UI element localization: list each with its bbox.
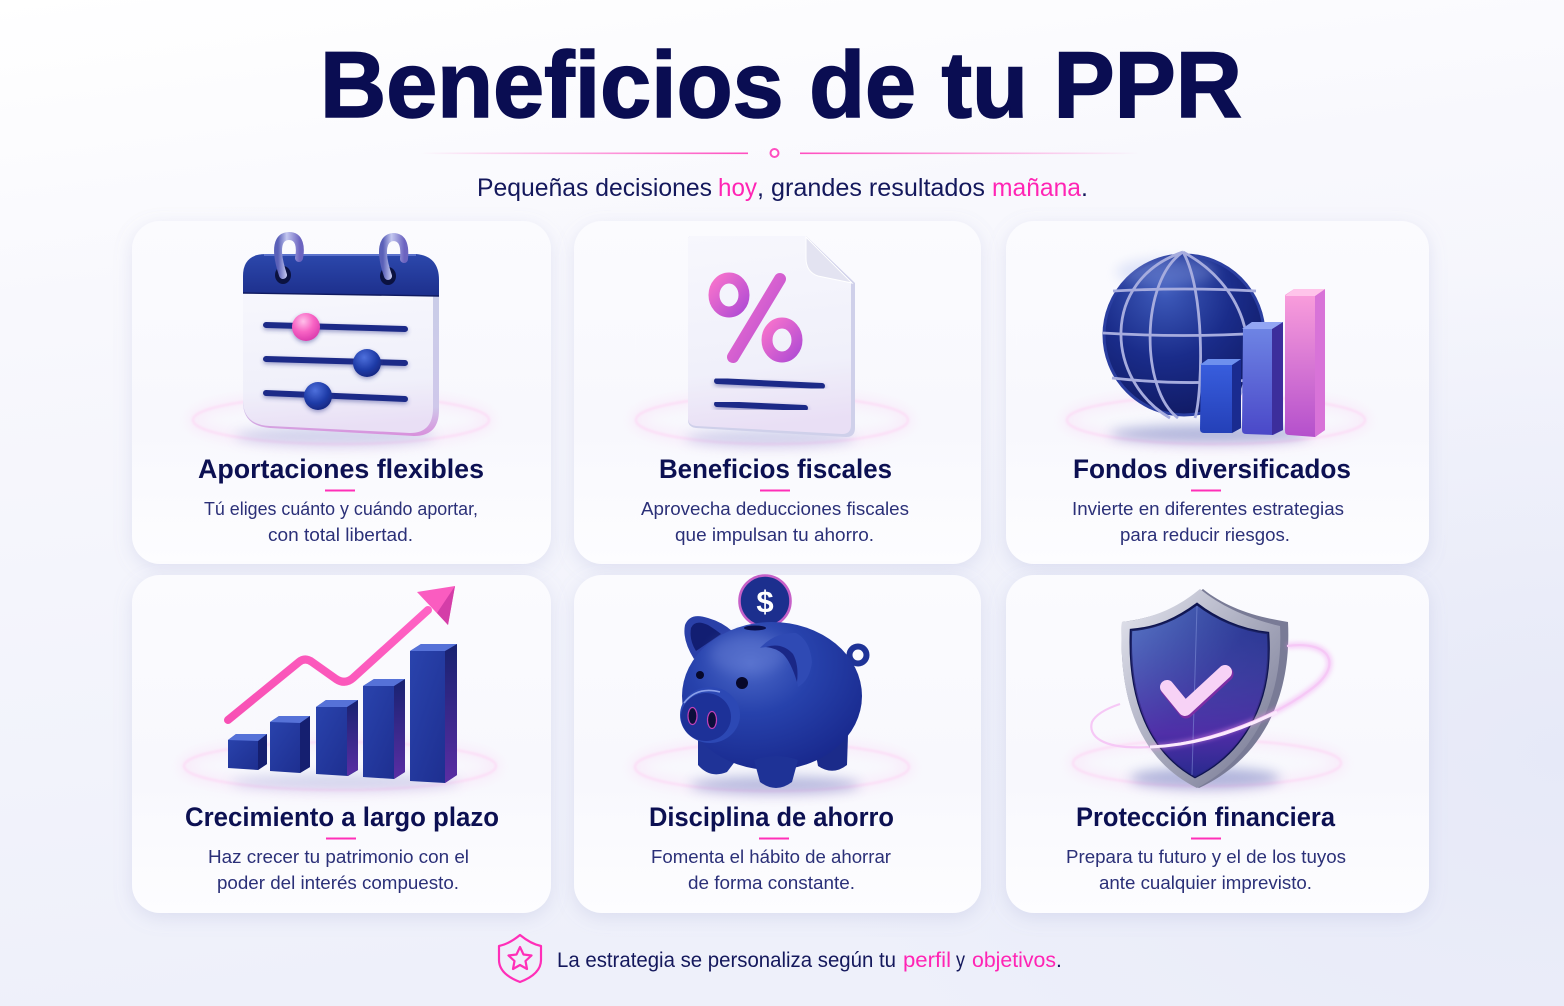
footer note: y <box>956 949 965 972</box>
panel: aportaciones flexibles <box>132 221 551 564</box>
footer note: La estrategia se personaliza según tu <box>557 949 896 972</box>
description: Haz crecer tu patrimonio con el <box>208 846 469 867</box>
description: poder del interés compuesto. <box>217 872 459 893</box>
description <box>208 846 469 893</box>
subtitle <box>477 174 1088 202</box>
coin: $ <box>756 584 774 619</box>
description: para reducir riesgos. <box>1120 524 1290 545</box>
footer note <box>557 949 1062 972</box>
icon: growth bars and arrow <box>184 586 496 790</box>
panel: beneficios fiscales <box>574 221 981 564</box>
description <box>651 846 891 893</box>
icon: shield with check <box>1073 589 1341 789</box>
description: Fomenta el hábito de ahorrar <box>651 846 891 867</box>
icon: piggy bank with coin <box>635 576 909 794</box>
panel: fondos diversificados <box>1006 221 1429 564</box>
heading: Disciplina de ahorro <box>649 802 894 832</box>
description <box>1066 846 1346 893</box>
footer note: objetivos <box>972 949 1056 972</box>
description: ante cualquier imprevisto. <box>1099 872 1312 893</box>
heading: Aportaciones flexibles <box>198 454 484 484</box>
icon: shield with star <box>499 935 541 982</box>
description: de forma constante. <box>688 872 855 893</box>
description: Tú eliges cuánto y cuándo aportar, <box>204 498 478 519</box>
footer note: perfil <box>903 949 951 972</box>
subtitle: Pequeñas decisiones <box>477 174 712 202</box>
description <box>641 498 909 545</box>
panel: protección financiera <box>1006 575 1429 913</box>
description: Aprovecha deducciones fiscales <box>641 498 909 519</box>
orbit ring <box>1150 645 1329 747</box>
subtitle: hoy <box>718 174 757 202</box>
panel: disciplina de ahorro <box>574 575 981 913</box>
description: que impulsan tu ahorro. <box>675 524 874 545</box>
heading: Crecimiento a largo plazo <box>185 802 499 832</box>
icon: calendar with sliders <box>193 236 489 446</box>
heading: Protección financiera <box>1076 802 1336 832</box>
description: Prepara tu futuro y el de los tuyos <box>1066 846 1346 867</box>
description: Invierte en diferentes estrategias <box>1072 498 1344 519</box>
panel: crecimiento a largo plazo <box>132 575 551 913</box>
subtitle: mañana <box>992 174 1081 202</box>
description <box>1072 498 1344 545</box>
description: con total libertad. <box>268 524 413 545</box>
subtitle: , grandes resultados <box>757 174 985 202</box>
subtitle: . <box>1081 174 1088 202</box>
heading: Beneficios fiscales <box>659 454 892 484</box>
icon: globe with bars <box>1067 252 1365 444</box>
icon: tax document with percent <box>636 236 908 447</box>
footer note: . <box>1056 949 1062 972</box>
title: Beneficios de tu PPR <box>320 32 1242 137</box>
heading: Fondos diversificados <box>1073 454 1351 484</box>
coin <box>740 576 790 626</box>
description <box>204 498 478 545</box>
title divider <box>420 149 1140 157</box>
